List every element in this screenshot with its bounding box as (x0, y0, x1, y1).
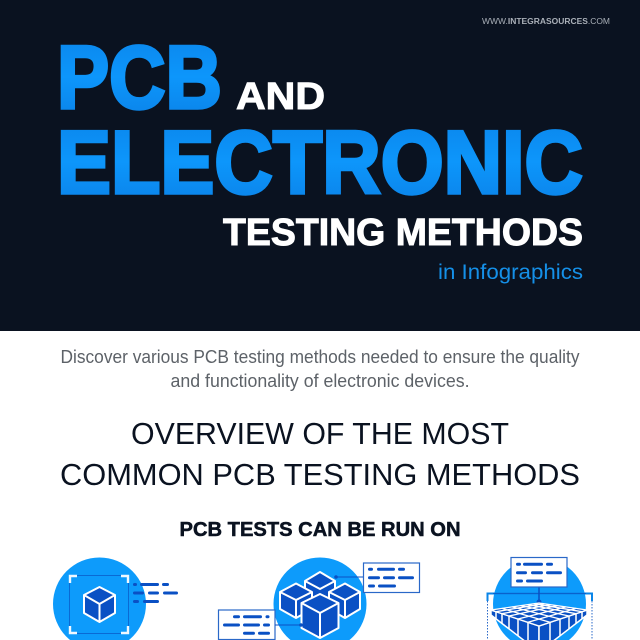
sub heading: PCB TESTS CAN BE RUN ON (180, 519, 460, 541)
title: PCB: PCB (57, 27, 222, 127)
intro text: and functionality of electronic devices. (170, 370, 470, 391)
callout: right (334, 563, 420, 592)
intro text (60, 346, 580, 391)
board sides (491, 610, 539, 640)
header banner (0, 0, 640, 331)
title: testing methods: TESTING METHODS (223, 212, 583, 254)
title: AND: AND (236, 76, 325, 118)
icon: full board (488, 558, 592, 640)
callout: top (511, 558, 567, 587)
section heading: COMMON PCB TESTING METHODS (60, 457, 580, 492)
intro text: Discover various PCB testing methods needed to ensure the quality (60, 346, 580, 367)
section heading: OVERVIEW OF THE MOST (131, 416, 509, 451)
icon: group of components (218, 558, 420, 640)
subtitle: in infographics: in Infographics (438, 261, 583, 284)
section heading (60, 416, 580, 492)
callout: left (218, 610, 303, 640)
title: ELECTRONIC: ELECTRONIC (57, 112, 583, 212)
board surface (491, 603, 587, 626)
icon: single component (53, 558, 176, 640)
website url: WWW.INTEGRASOURCES .COM (482, 17, 610, 26)
